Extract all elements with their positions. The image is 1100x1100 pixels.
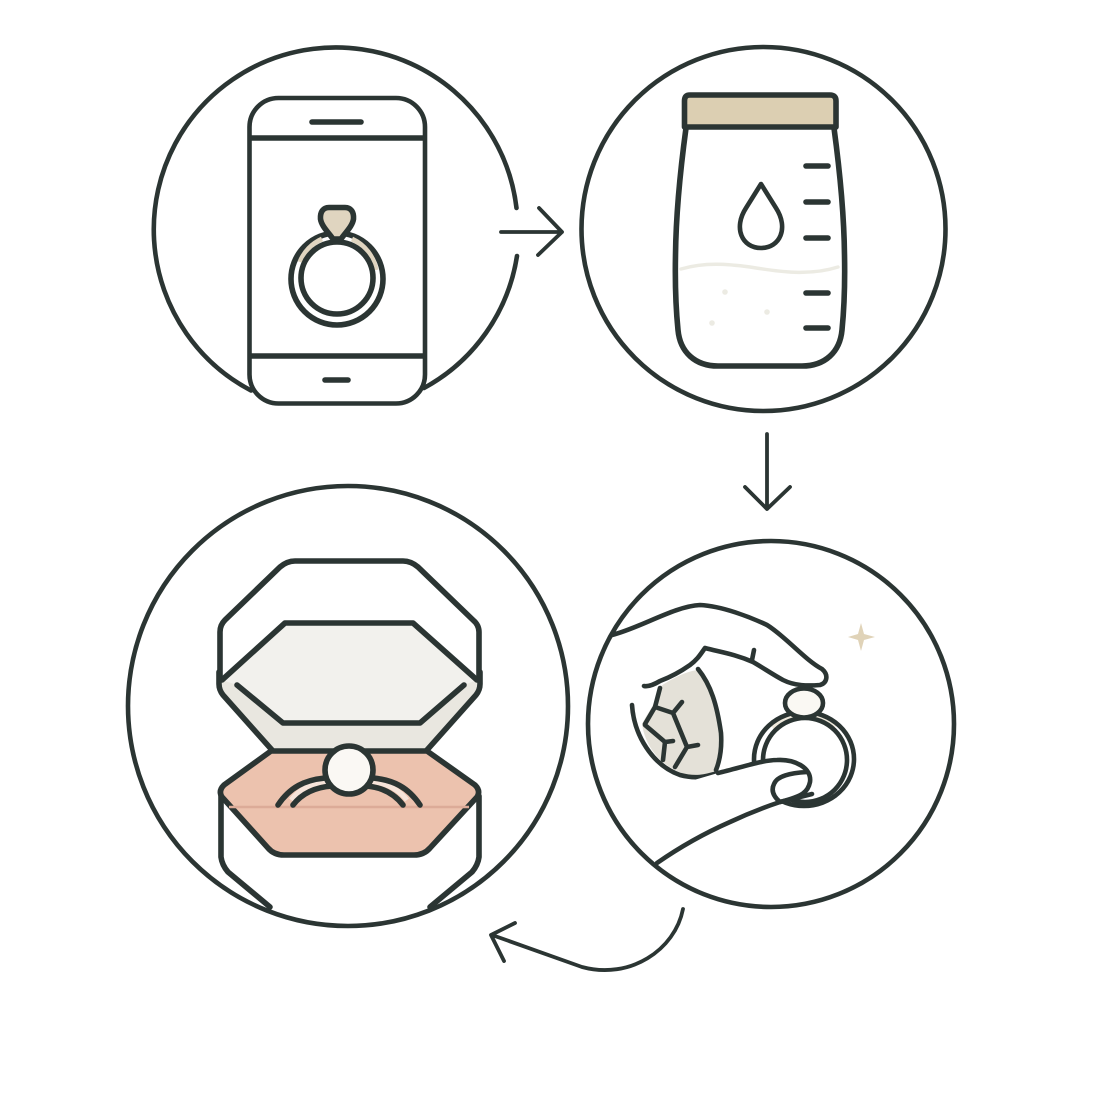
icon: ring box [219,561,480,907]
ring in box [278,746,420,805]
icon: phone [250,98,425,404]
panel: phone showing ring [154,47,517,404]
icon: sparkle [848,623,875,651]
circle outline [128,486,568,926]
icon: water drop [740,184,782,248]
stone in palm [642,670,720,777]
box base sides [221,796,479,907]
arrow: hand to box [491,909,683,970]
arrow: jar to hand [745,434,790,509]
box base interior [220,751,479,855]
outer lid [220,561,479,680]
lid interior [221,623,478,750]
stone right edge [698,669,721,770]
palm lower curve [632,705,718,777]
thumb [657,760,810,863]
circle outline [582,47,946,411]
icon: hand [612,605,826,863]
circle outline with gap [154,47,517,391]
icon: jar [675,95,845,366]
liquid surface [681,264,838,272]
veins [645,688,698,767]
finger upper [612,605,826,686]
arrow: phone to jar [501,208,562,255]
finger crease [752,650,754,660]
circle outline [588,541,954,907]
icon: ring on screen [291,208,383,325]
measurement ticks [806,166,828,328]
icon: ring held [754,688,854,806]
sediment dots [709,289,770,326]
panel: hand holding ring [588,541,954,907]
jar lid [684,95,836,127]
panel: open ring box [128,486,568,926]
panel: jar of cleaning liquid [582,47,946,411]
base crease [229,806,469,808]
wrist lower edge [657,794,812,863]
